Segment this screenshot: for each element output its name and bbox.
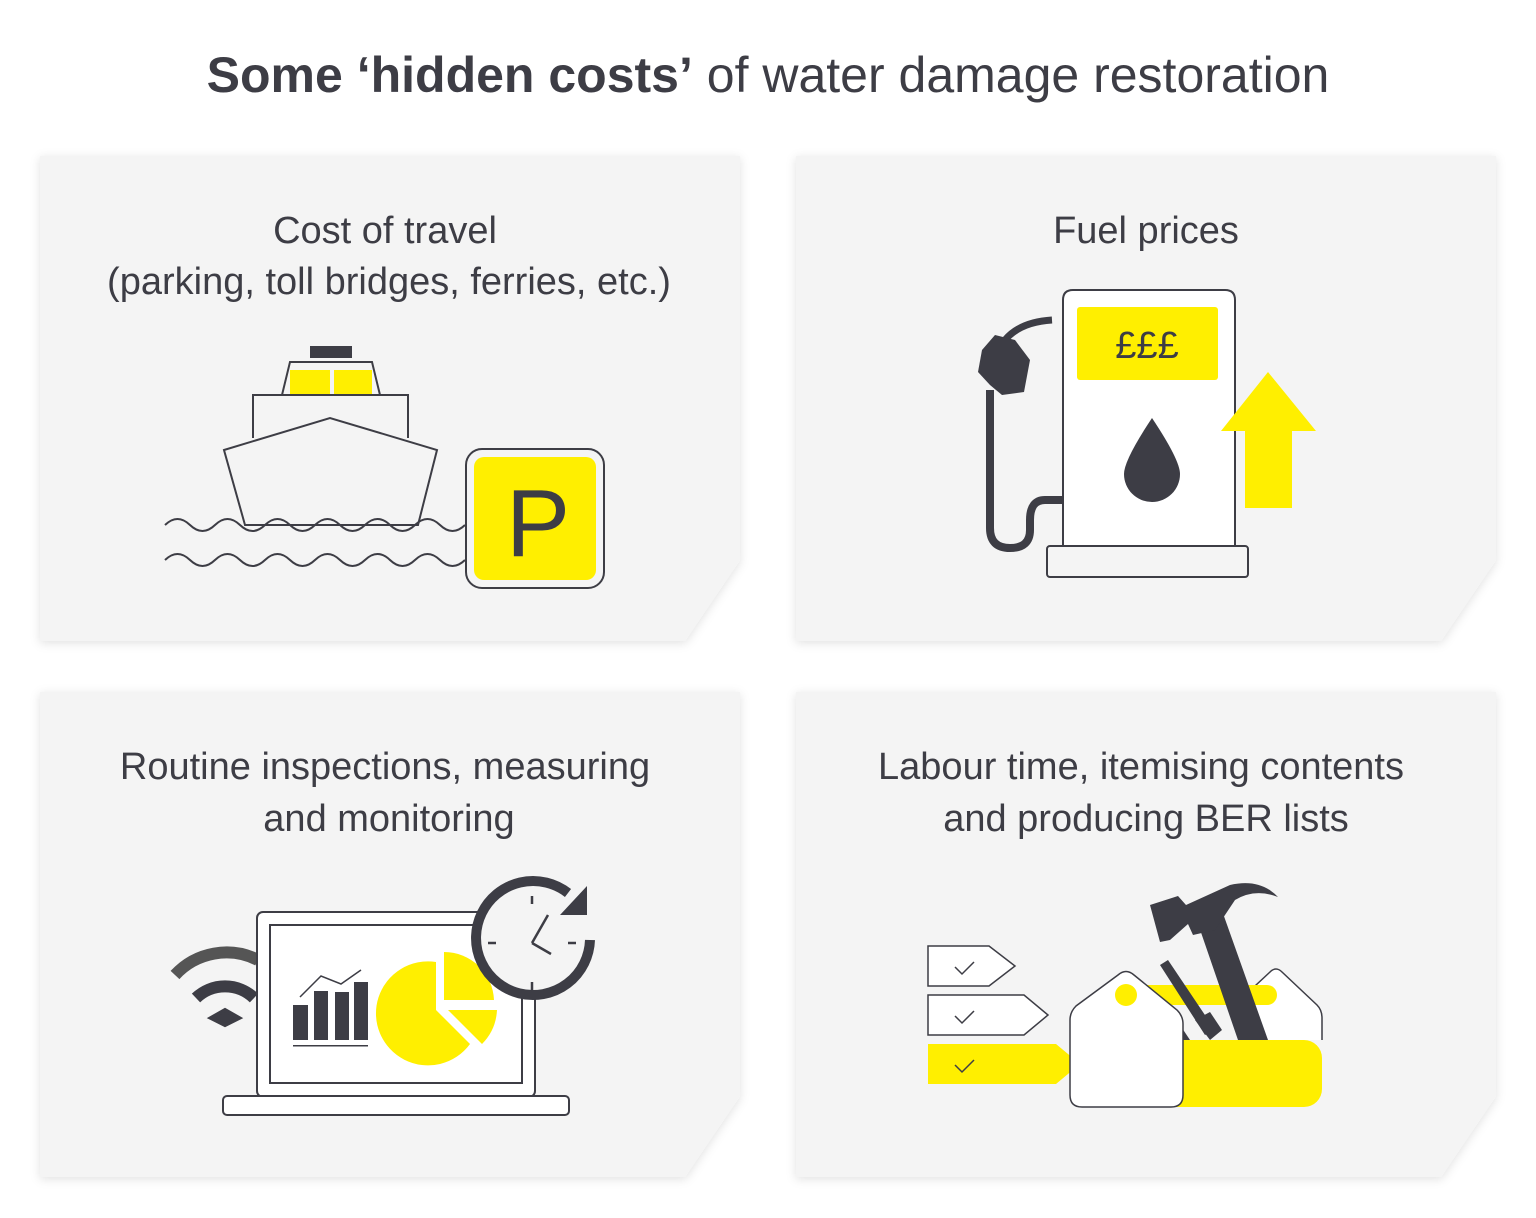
chart: pie xyxy=(376,952,497,1065)
heading: cost of travel: Cost of travel xyxy=(273,210,497,252)
panel: labour time xyxy=(796,692,1496,1177)
heading: fuel prices: Fuel prices xyxy=(1053,210,1239,252)
title: Some ‘hidden costs’ of water damage restoration xyxy=(207,47,1329,103)
icon: up arrow xyxy=(1221,372,1316,508)
icon: ferry xyxy=(165,346,465,566)
icon: checklist tags xyxy=(928,946,1080,1084)
heading: labour time: Labour time, itemising contents xyxy=(878,746,1404,788)
icon: parking sign: P xyxy=(506,470,570,577)
panel: routine inspections: and monitoring xyxy=(263,798,515,840)
panel: cost of travel xyxy=(40,156,740,641)
icon: wifi xyxy=(175,952,258,1025)
icon: parking sign xyxy=(466,449,604,588)
subheading: (parking, toll bridges, ferries, etc.) xyxy=(107,261,671,303)
icon: toolbox xyxy=(1070,883,1322,1107)
heading: routine inspections: Routine inspections, measuring xyxy=(120,746,650,788)
icon: laptop xyxy=(223,912,569,1115)
icon: clock xyxy=(476,881,590,995)
icon: fuel pump xyxy=(978,290,1248,577)
chart: bars xyxy=(293,970,368,1046)
panel: labour time: and producing BER lists xyxy=(943,798,1349,840)
panel: routine inspections xyxy=(40,692,740,1177)
panel: fuel prices xyxy=(796,156,1496,641)
icon: fuel pump: £££ xyxy=(1115,325,1179,367)
